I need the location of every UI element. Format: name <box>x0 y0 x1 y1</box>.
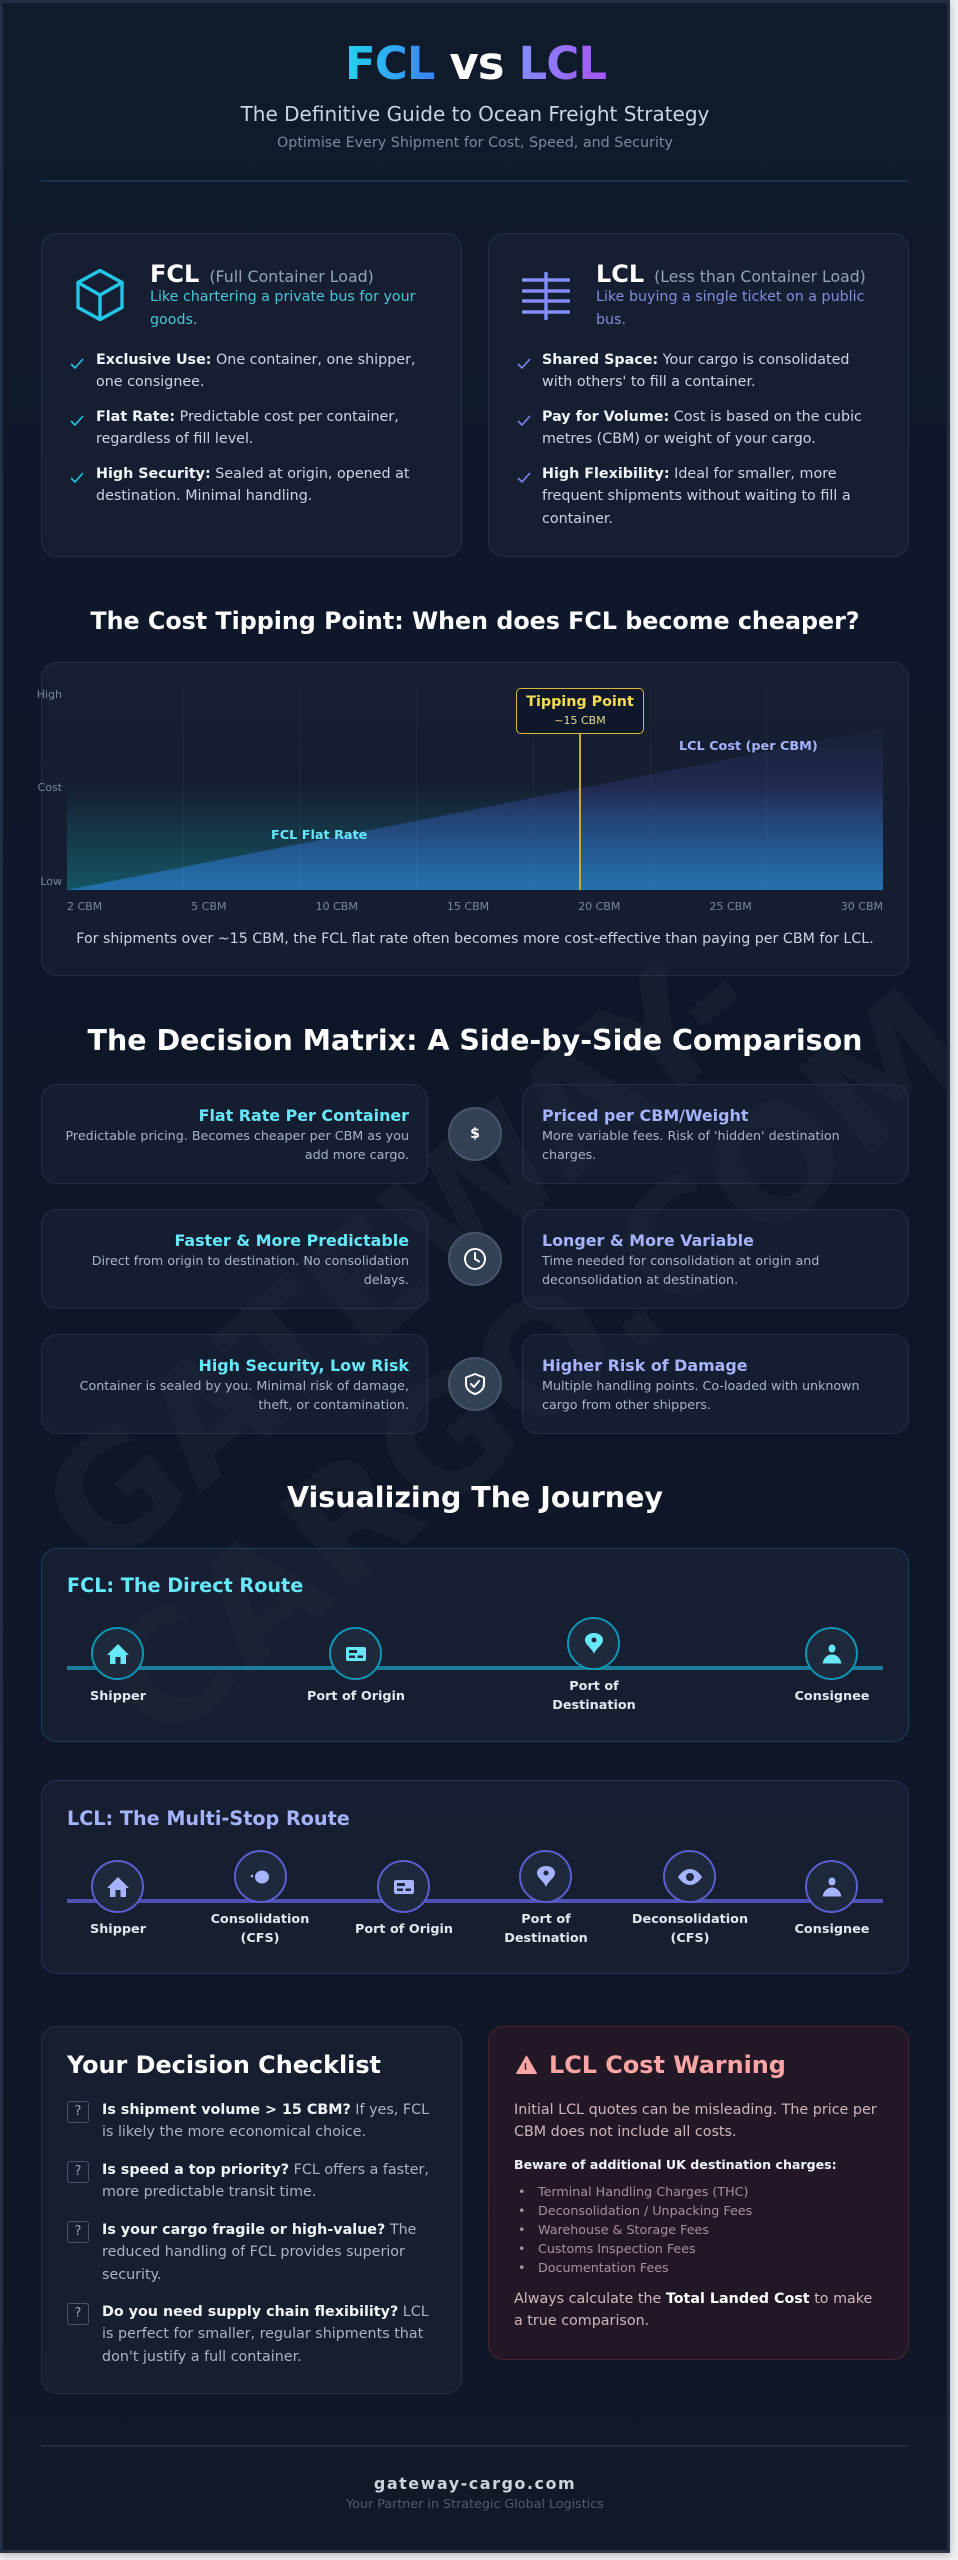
warning intro <box>514 2102 877 2140</box>
heading: checklist: Your Decision Checklist <box>67 2051 381 2079</box>
tipping point marker: ~15 CBM <box>554 714 606 727</box>
tagline: Optimise Every Shipment for Cost, Speed, and Security <box>277 135 673 151</box>
checklist item 2: more predictable transit time. <box>102 2184 316 2200</box>
stop: port of destination: Destination <box>504 1931 588 1946</box>
checklist item 1 <box>67 2101 429 2140</box>
analogy: Like chartering a private bus for your <box>150 289 416 305</box>
footer tagline: Your Partner in Strategic Global Logistics <box>346 2496 604 2511</box>
stop: shipper <box>90 1860 146 1937</box>
title: FCL vs LCL <box>345 37 606 90</box>
checklist item 1: ? <box>75 2104 81 2119</box>
checklist item 4: don't justify a full container. <box>102 2349 302 2365</box>
matrix row: speed right <box>522 1209 909 1309</box>
chart caption: For shipments over ~15 CBM, the FCL flat rate often becomes more cost-effective than paying per CBM for LCL. <box>76 931 874 947</box>
checklist item 2: ? <box>75 2164 81 2179</box>
matrix row: cost right <box>522 1084 909 1184</box>
y axis labels: Cost <box>38 781 62 794</box>
analogy: bus. <box>596 312 626 328</box>
panel: decision checklist <box>41 2026 462 2394</box>
stop: shipper <box>90 1627 146 1704</box>
matrix row: risk left <box>41 1334 428 1434</box>
stop: consignee <box>795 1860 869 1937</box>
subtitle: The Definitive Guide to Ocean Freight Strategy <box>241 102 709 126</box>
matrix row: risk right: cargo from other shippers. <box>542 1397 711 1412</box>
heading: decision matrix: The Decision Matrix: A Side-by-Side Comparison <box>88 1024 862 1057</box>
tipping point marker: Tipping Point <box>526 694 634 710</box>
checklist item 3: security. <box>102 2267 162 2283</box>
warning intro: CBM does not include all costs. <box>514 2124 736 2140</box>
warning list: Customs Inspection Fees <box>538 2241 696 2256</box>
stop: port of origin: Port of Origin <box>307 1689 405 1704</box>
panel: cost chart <box>41 662 909 976</box>
checklist item 1: is likely the more economical choice. <box>102 2124 366 2140</box>
x axis labels: 25 CBM <box>709 900 752 913</box>
stop: consignee: Consignee <box>795 1922 869 1937</box>
heading: LCL route: LCL: The Multi-Stop Route <box>67 1807 350 1830</box>
warning list: Documentation Fees <box>538 2260 669 2275</box>
warning closing: a true comparison. <box>514 2313 649 2329</box>
stop: consolidation: (CFS) <box>240 1931 280 1946</box>
checklist item 3 <box>67 2221 416 2283</box>
matrix row: speed left: delays. <box>364 1272 409 1287</box>
stop: port of destination: Port of <box>521 1912 571 1927</box>
check list: Exclusive Use: One container, one shipper, <box>96 352 416 368</box>
heading: FCL: FCL (Full Container Load) <box>150 260 374 288</box>
matrix row: risk left: High Security, Low Risk <box>199 1356 409 1375</box>
checklist item 4: is perfect for smaller, regular shipments that <box>102 2326 423 2342</box>
warning closing: Always calculate the Total Landed Cost to make <box>514 2291 872 2307</box>
stop: deconsolidation: (CFS) <box>670 1931 710 1946</box>
analogy <box>150 289 416 328</box>
x axis labels: 30 CBM <box>841 900 883 913</box>
checklist item 3: ? <box>75 2224 81 2239</box>
matrix row: cost right: Priced per CBM/Weight <box>542 1106 748 1125</box>
checklist item 3: Is your cargo fragile or high-value? The <box>102 2222 416 2238</box>
icon: shared lines <box>522 272 570 320</box>
matrix row: cost left <box>41 1084 428 1184</box>
stop: consignee: Consignee <box>795 1689 869 1704</box>
watermark: GATEWAY- <box>8 907 791 1605</box>
matrix row: speed right: deconsolidation at destination. <box>542 1272 738 1287</box>
check list: Shared Space: Your cargo is consolidated <box>542 352 849 368</box>
check list: with others' to fill a container. <box>542 374 756 390</box>
x axis labels: 2 CBM <box>67 900 102 913</box>
checklist item 1: Is shipment volume > 15 CBM? If yes, FCL <box>102 2102 429 2118</box>
matrix row: speed right: Time needed for consolidation at origin and <box>542 1253 819 1268</box>
warning list: • <box>518 2203 525 2218</box>
warning list: • <box>518 2260 525 2275</box>
warning list <box>518 2184 752 2275</box>
checklist item 2: Is speed a top priority? FCL offers a faster, <box>102 2162 429 2178</box>
heading: journey: Visualizing The Journey <box>287 1481 663 1514</box>
check list: frequent shipments without waiting to fill a <box>542 488 851 504</box>
stop: shipper: Shipper <box>90 1689 146 1704</box>
matrix row: speed left <box>41 1209 428 1309</box>
check list: container. <box>542 511 613 527</box>
footer brand: gateway-cargo.com <box>374 2474 576 2493</box>
tipping point marker <box>516 688 644 890</box>
matrix row: risk right <box>522 1334 909 1434</box>
warning closing <box>514 2291 872 2329</box>
heading: LCL: LCL (Less than Container Load) <box>596 260 866 288</box>
warning intro: Initial LCL quotes can be misleading. The price per <box>514 2102 877 2118</box>
warning list: Deconsolidation / Unpacking Fees <box>538 2203 752 2218</box>
matrix row: cost right: charges. <box>542 1147 596 1162</box>
stop: consolidation <box>211 1850 309 1946</box>
check list <box>70 352 416 504</box>
heading: cost tipping point: The Cost Tipping Point: When does FCL become cheaper? <box>90 607 860 635</box>
matrix row: cost left: Flat Rate Per Container <box>199 1106 409 1125</box>
route line: FCL <box>67 1666 883 1670</box>
icon: cube <box>76 268 124 322</box>
panel: FCL <box>41 233 462 557</box>
stop: consolidation: Consolidation <box>211 1912 309 1927</box>
warning list: Warehouse & Storage Fees <box>538 2222 709 2237</box>
checklist item 4: ? <box>75 2306 81 2321</box>
warning list: • <box>518 2222 525 2237</box>
checklist item 3: reduced handling of FCL provides superior <box>102 2244 405 2260</box>
checklist item 4: Do you need supply chain flexibility? LCL <box>102 2304 429 2320</box>
check list: Pay for Volume: Cost is based on the cubic <box>542 409 862 425</box>
checklist item 2 <box>67 2161 429 2200</box>
checklist item 4 <box>67 2303 429 2365</box>
check list: High Security: Sealed at origin, opened at <box>96 466 409 482</box>
stop: port of destination <box>504 1850 588 1946</box>
stop: port of destination: Destination <box>552 1698 636 1713</box>
y axis labels: High <box>37 688 62 701</box>
check list <box>518 352 862 527</box>
matrix row: speed left: Direct from origin to destination. No consolidation <box>92 1253 409 1268</box>
stop: port of destination: Port of <box>569 1679 619 1694</box>
check list: Flat Rate: Predictable cost per container, <box>96 409 399 425</box>
warning subhead: Beware of additional UK destination charges: <box>514 2157 837 2172</box>
analogy: Like buying a single ticket on a public <box>596 289 864 305</box>
heading: FCL route: FCL: The Direct Route <box>67 1574 303 1597</box>
check list: metres (CBM) or weight of your cargo. <box>542 431 816 447</box>
matrix row: cost left: add more cargo. <box>305 1147 409 1162</box>
matrix row: speed left: Faster & More Predictable <box>174 1231 409 1250</box>
stop: port of destination <box>552 1617 636 1713</box>
stop: consignee <box>795 1627 869 1704</box>
warning list: Terminal Handling Charges (THC) <box>538 2184 748 2199</box>
analogy: goods. <box>150 312 197 328</box>
icon: warning <box>516 2056 537 2074</box>
warning list: • <box>518 2184 525 2199</box>
stop: port of origin <box>355 1860 453 1937</box>
analogy <box>596 289 864 328</box>
x axis labels: 10 CBM <box>316 900 358 913</box>
panel: LCL warning <box>488 2026 909 2360</box>
check list: High Flexibility: Ideal for smaller, more <box>542 466 837 482</box>
matrix row: risk right: Multiple handling points. Co-loaded with unknown <box>542 1378 860 1393</box>
stop: port of origin <box>307 1627 405 1704</box>
matrix row: risk left: theft, or contamination. <box>258 1397 409 1412</box>
chart: cost vs volume <box>67 734 883 890</box>
check list: one consignee. <box>96 374 205 390</box>
check list: regardless of fill level. <box>96 431 253 447</box>
stop: port of origin: Port of Origin <box>355 1922 453 1937</box>
stop: deconsolidation <box>632 1850 748 1946</box>
stop: deconsolidation: Deconsolidation <box>632 1912 748 1927</box>
y axis labels <box>37 688 62 888</box>
matrix row: risk left: Container is sealed by you. Minimal risk of damage, <box>80 1378 409 1393</box>
x axis labels: 5 CBM <box>191 900 227 913</box>
label: FCL flat rate: FCL Flat Rate <box>271 828 367 843</box>
matrix row: speed right: Longer & More Variable <box>542 1231 754 1250</box>
icon: dollar <box>448 1107 502 1161</box>
icon: dollar: $ <box>470 1126 480 1142</box>
x axis labels: 15 CBM <box>447 900 489 913</box>
matrix row: risk right: Higher Risk of Damage <box>542 1356 748 1375</box>
panel: LCL route <box>41 1780 909 1974</box>
heading: warning: LCL Cost Warning <box>549 2051 786 2079</box>
icon: clock <box>448 1232 502 1286</box>
label: LCL cost: LCL Cost (per CBM) <box>679 739 818 754</box>
route line: LCL <box>67 1899 883 1903</box>
x axis labels <box>67 900 883 913</box>
panel: LCL <box>488 233 909 557</box>
matrix row: cost right: More variable fees. Risk of 'hidden' destination <box>542 1128 840 1143</box>
y axis labels: Low <box>40 875 62 888</box>
panel: FCL route <box>41 1548 909 1742</box>
matrix row: cost left: Predictable pricing. Becomes cheaper per CBM as you <box>66 1128 409 1143</box>
warning list: • <box>518 2241 525 2256</box>
icon: shield <box>448 1357 502 1411</box>
x axis labels: 20 CBM <box>578 900 620 913</box>
stop: shipper: Shipper <box>90 1922 146 1937</box>
check list: destination. Minimal handling. <box>96 488 312 504</box>
